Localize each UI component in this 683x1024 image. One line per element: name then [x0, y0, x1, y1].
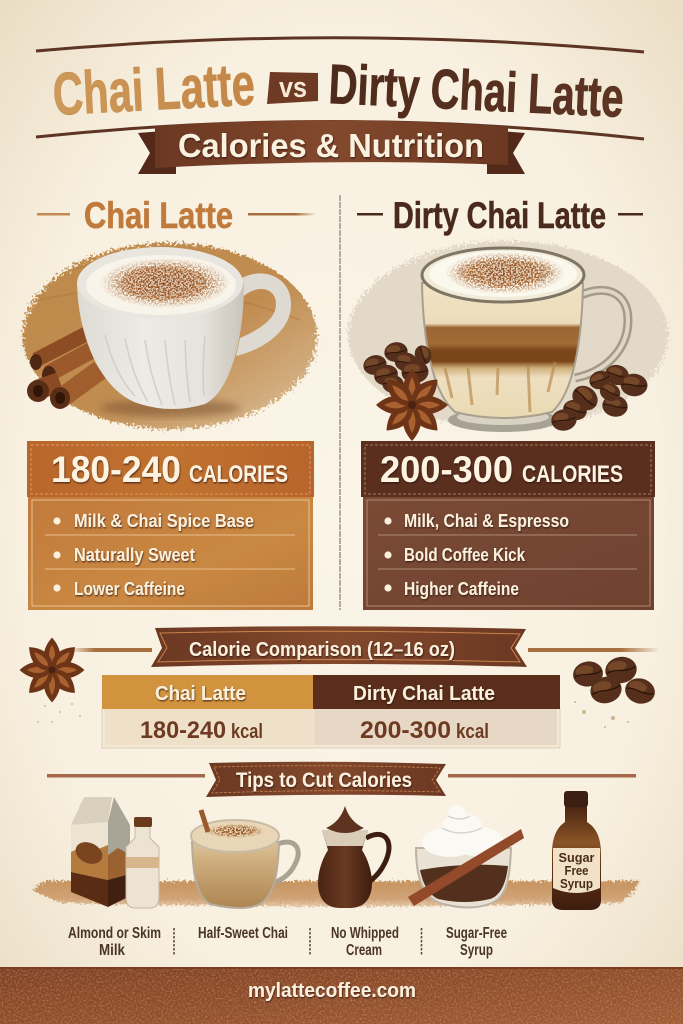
illustration: layered dirty chai in glass mug [348, 241, 668, 441]
banner: Tips to Cut Calories [47, 762, 636, 797]
tip labels: Half-Sweet Chai [198, 925, 288, 942]
heading: Dirty Chai Latte column: Dirty Chai Latte [393, 195, 606, 236]
ribbon: Calories & Nutrition [138, 120, 525, 174]
panel: Chai Latte calories [27, 441, 314, 610]
table headers: Dirty Chai Latte [353, 683, 495, 705]
banner: Calorie Comparison: Calorie Comparison (12–16 oz) [189, 639, 455, 661]
icon: sugar-free syrup bottle: Sugar [558, 850, 594, 865]
title: Chai Latte: Chai Latte [51, 51, 256, 128]
footer band [0, 967, 683, 1024]
icon: coffee beans right [571, 654, 658, 707]
cinnamon dusting [445, 252, 565, 294]
table values: 180-240 [140, 717, 226, 744]
feature list: Milk & Chai Spice Base [74, 511, 254, 531]
tip labels: Sugar-Free [446, 925, 507, 942]
column divider [339, 195, 341, 610]
tip labels: Almond or Skim [68, 925, 161, 942]
feature list: Milk, Chai & Espresso [404, 511, 569, 531]
banner: Tips to Cut Calories: Tips to Cut Calories [236, 769, 412, 792]
icon: coffee beans right [550, 362, 648, 433]
spice specks right [574, 701, 629, 728]
illustration: white chai latte mug on wood [23, 243, 317, 429]
table: calorie comparison [102, 675, 560, 748]
icon: star anise [376, 369, 448, 441]
tip labels [68, 925, 507, 959]
feature list [45, 511, 295, 599]
feature list: Bold Coffee Kick [404, 545, 526, 565]
panel: Dirty Chai Latte calories [361, 441, 655, 610]
table values: kcal [456, 721, 489, 743]
spice streak behind tips [32, 881, 640, 906]
calories heading: 200-300 [380, 449, 513, 490]
badge: vs: vs [279, 72, 307, 104]
icon: coffee beans left [361, 340, 434, 394]
table headers: Chai Latte [155, 683, 246, 705]
calories heading: CALORIES [522, 461, 623, 488]
feature list [378, 511, 637, 599]
icon: half-sweet chai glass mug [191, 810, 298, 908]
calories heading: CALORIES [189, 461, 288, 488]
table headers [155, 683, 495, 705]
calories heading: 180-240 [51, 449, 181, 490]
icon: cinnamon sticks [27, 334, 100, 409]
banner: Calorie Comparison [70, 626, 660, 667]
icon: almond milk carton and bottle [71, 797, 159, 908]
calories heading [51, 449, 288, 490]
table values: kcal [231, 721, 263, 743]
footer website: mylattecoffee.com [248, 980, 416, 1002]
icon: sugar-free syrup bottle [552, 791, 601, 910]
icon: sugar-free syrup bottle: Free [564, 863, 588, 878]
table values: 200-300 [360, 717, 451, 744]
icon: star anise left [20, 638, 84, 702]
feature list: Naturally Sweet [74, 545, 195, 565]
icon: sugar-free syrup bottle: Syrup [560, 876, 593, 891]
tip labels: Cream [346, 942, 382, 959]
icon: syrup pitcher [318, 806, 389, 908]
feature list: Lower Caffeine [74, 579, 185, 599]
calories heading [380, 449, 623, 490]
badge: vs [267, 72, 318, 104]
tip labels: Milk [99, 942, 125, 959]
cinnamon dusting [100, 258, 230, 308]
tip labels: No Whipped [331, 925, 399, 942]
spice specks left [37, 703, 81, 723]
header: title group [36, 38, 644, 139]
heading: Chai Latte column: Chai Latte [84, 195, 233, 236]
feature list: Higher Caffeine [404, 579, 519, 599]
icon: whipped cream cup crossed out [408, 805, 524, 908]
table values [140, 717, 489, 744]
tip labels: Syrup [460, 942, 493, 959]
ribbon: Calories & Nutrition: Calories & Nutrition [178, 127, 484, 164]
